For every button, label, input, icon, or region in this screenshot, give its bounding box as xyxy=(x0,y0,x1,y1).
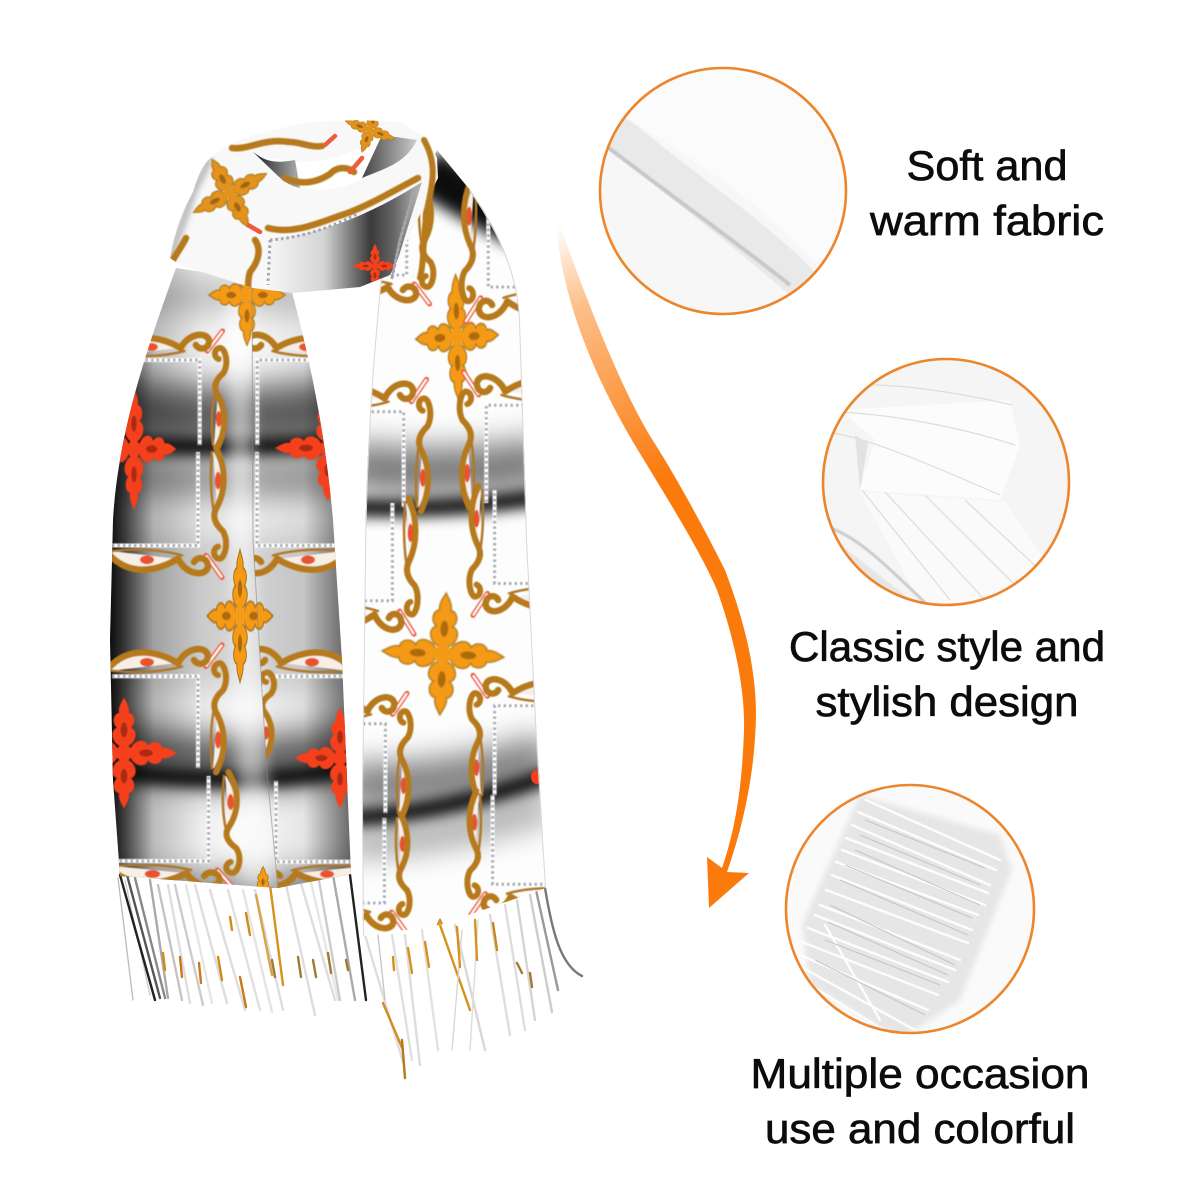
scarf fringe: left tail xyxy=(118,875,366,1015)
scarf left tail xyxy=(71,245,385,919)
scarf right tail xyxy=(303,150,576,977)
neck scrolls xyxy=(172,141,418,290)
neck soft edge shade xyxy=(170,158,210,258)
red spot at edge xyxy=(531,770,540,784)
neck hollow xyxy=(253,135,382,189)
feature 3 caption xyxy=(750,1050,1090,1152)
side shading xyxy=(110,260,352,900)
feature 1: fabric circle xyxy=(600,60,860,314)
fold line xyxy=(252,290,278,888)
feature 1 caption xyxy=(869,142,1104,244)
right panel edge xyxy=(362,190,546,936)
feature 3 caption: Multiple occasion xyxy=(750,1050,1090,1097)
border ornaments xyxy=(362,184,546,932)
feature 3 caption: use and colorful xyxy=(765,1105,1075,1152)
small orange cross at fold bottom xyxy=(256,866,280,888)
scarf fringe: right tail xyxy=(365,888,582,1078)
orange cross xyxy=(207,550,273,682)
product illustration and feature list xyxy=(110,66,1104,1144)
scarf neck wrap xyxy=(170,120,438,293)
white front fold highlight xyxy=(225,290,278,888)
left section ornaments xyxy=(108,331,239,890)
feature 2 caption: stylish design xyxy=(816,678,1078,725)
feature 1 caption: warm fabric xyxy=(869,197,1104,244)
red crosses xyxy=(112,390,348,809)
neck orange crosses xyxy=(192,158,268,228)
feature 2 caption: Classic style and xyxy=(789,623,1105,670)
neck front shaded panel xyxy=(270,182,422,295)
neck back dark flap xyxy=(362,135,417,178)
feature 2 caption xyxy=(789,623,1105,725)
orange crosses xyxy=(414,272,500,402)
orange cross under neck xyxy=(207,282,287,348)
neck red cross xyxy=(352,244,394,282)
neck right strip and scroll xyxy=(392,140,433,278)
feature 1 caption: Soft and xyxy=(906,142,1068,189)
right section ornaments xyxy=(252,330,351,888)
curved arrow xyxy=(556,225,756,908)
shaded bands xyxy=(100,295,360,892)
feature 2: fold circle xyxy=(822,359,1080,620)
feature 3: fringe circle xyxy=(786,785,1034,1040)
